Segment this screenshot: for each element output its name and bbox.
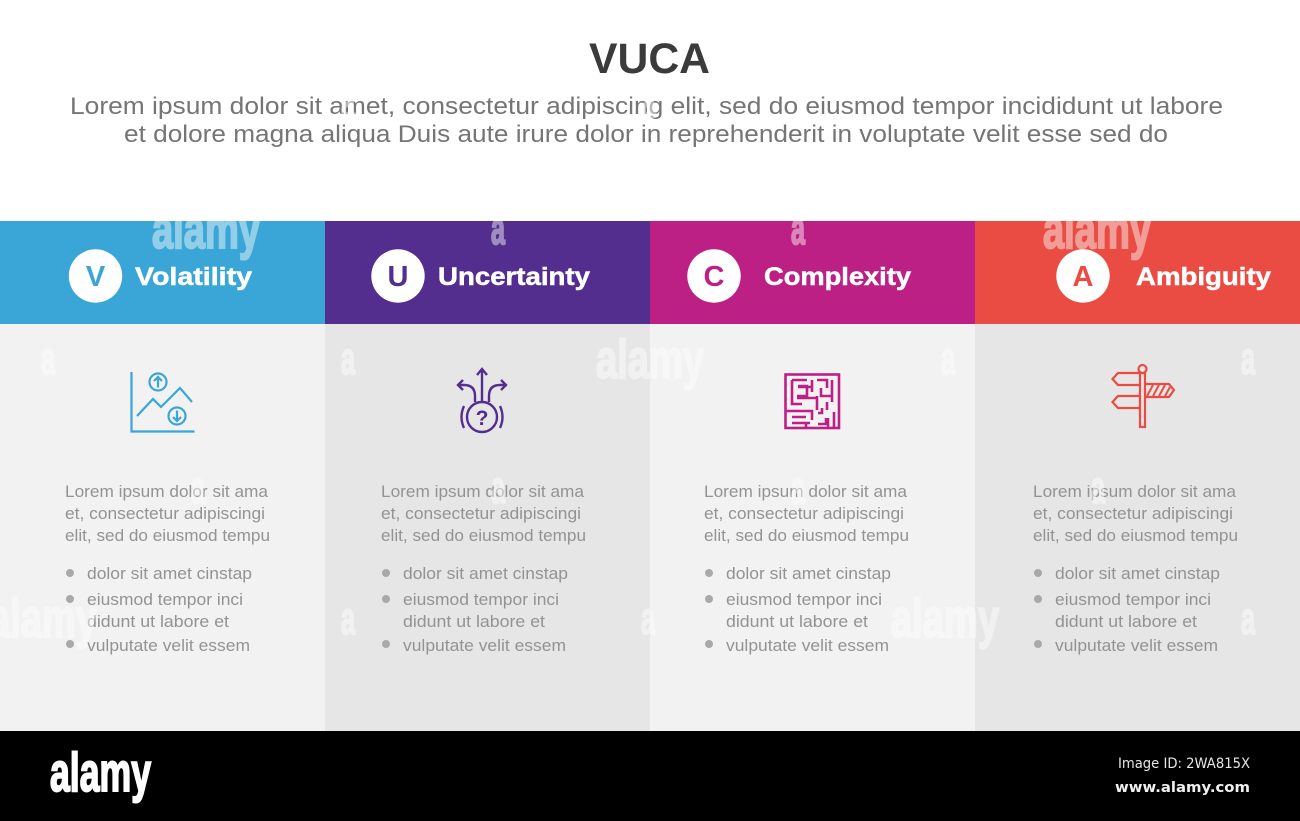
bullet list: uncertainty: vulputate velit essem [403, 636, 566, 655]
badge: U: U [388, 261, 408, 293]
watermark overlay: a [41, 333, 56, 384]
icon: maze [786, 374, 839, 428]
watermark overlay: a [1241, 333, 1256, 384]
description: ambiguity: Lorem ipsum dolor sit ama [1033, 482, 1237, 501]
header band: volatility [0, 221, 325, 324]
watermark overlay: a [641, 593, 656, 644]
bullet list: volatility [66, 564, 252, 655]
bullet list: ambiguity [1034, 564, 1220, 655]
description: ambiguity [1033, 482, 1238, 545]
description: volatility [65, 482, 270, 545]
icon: branching arrows with question mark [458, 369, 506, 432]
watermark overlay: a [341, 333, 356, 384]
bullet list: complexity: eiusmod tempor inci [726, 590, 882, 609]
watermark overlay: a [1241, 593, 1256, 644]
bullet list: volatility: vulputate velit essem [87, 636, 250, 655]
subtitle text block: et dolore magna aliqua Duis aute irure dolor in reprehenderit in voluptate velit esse sed do [124, 121, 1168, 148]
bullet list: volatility: dolor sit amet cinstap [87, 564, 252, 583]
bullet list: ambiguity: vulputate velit essem [1055, 636, 1218, 655]
description: complexity [704, 482, 909, 545]
watermark overlay: a [341, 76, 356, 127]
watermark overlay: a [641, 76, 656, 127]
bullet list: ambiguity: didunt ut labore et [1055, 612, 1197, 631]
watermark overlay: a [191, 462, 206, 513]
footer logo: alamy [50, 741, 151, 803]
bullet list: volatility: didunt ut labore et [87, 612, 229, 631]
bullet list: uncertainty [382, 564, 568, 655]
subtitle text block [70, 93, 1223, 148]
image id: Image ID: 2WA815X [1118, 756, 1250, 772]
body card: volatility [0, 324, 325, 731]
description: uncertainty: elit, sed do eiusmod tempu [381, 526, 586, 545]
badge: V [69, 249, 122, 303]
icon: branching arrows with question mark: ? [476, 407, 488, 430]
badge: V: V [86, 261, 106, 293]
panel: ambiguity [975, 221, 1300, 731]
bullet list: complexity: dolor sit amet cinstap [726, 564, 891, 583]
description: volatility: et, consectetur adipiscingi [65, 504, 265, 523]
bullet list: ambiguity: dolor sit amet cinstap [1055, 564, 1220, 583]
watermark overlay: a [791, 203, 806, 254]
watermark overlay: a [341, 593, 356, 644]
watermark overlay: a [791, 462, 806, 513]
watermark overlay: alamy [891, 587, 999, 649]
title: VUCA [589, 35, 710, 83]
footer bar [0, 731, 1300, 821]
description: complexity: Lorem ipsum dolor sit ama [704, 482, 908, 501]
description: uncertainty: et, consectetur adipiscingi [381, 504, 581, 523]
bullet list: uncertainty: didunt ut labore et [403, 612, 545, 631]
badge: C: C [704, 261, 725, 293]
icon: signpost [1112, 365, 1174, 427]
watermark overlay [0, 76, 1256, 649]
watermark overlay: alamy [152, 198, 260, 260]
bullet list: ambiguity: eiusmod tempor inci [1055, 590, 1211, 609]
bullet list: complexity: vulputate velit essem [726, 636, 889, 655]
bullet list: uncertainty: eiusmod tempor inci [403, 590, 559, 609]
badge: C [687, 249, 741, 303]
header band: uncertainty [325, 221, 650, 324]
body card: uncertainty [325, 324, 650, 731]
watermark overlay: a [491, 203, 506, 254]
description: volatility: elit, sed do eiusmod tempu [65, 526, 270, 545]
description: volatility: Lorem ipsum dolor sit ama [65, 482, 269, 501]
watermark overlay: alamy [596, 328, 704, 390]
heading: Uncertainty: Uncertainty [438, 263, 590, 291]
panel: volatility [0, 221, 325, 731]
description: complexity: et, consectetur adipiscingi [704, 504, 904, 523]
panel: uncertainty [325, 221, 650, 731]
description: ambiguity: et, consectetur adipiscingi [1033, 504, 1233, 523]
body card: ambiguity [975, 324, 1300, 731]
bullet list: volatility: eiusmod tempor inci [87, 590, 243, 609]
header band: complexity [650, 221, 975, 324]
website: www.alamy.com [1115, 780, 1250, 796]
bullet list: complexity: didunt ut labore et [726, 612, 868, 631]
badge: A [1056, 249, 1110, 303]
subtitle text block: Lorem ipsum dolor sit amet, consectetur adipiscing elit, sed do eiusmod tempor incididunt ut labore [70, 93, 1223, 120]
heading: Ambiguity: Ambiguity [1136, 263, 1271, 291]
icon: volatile chart [132, 372, 194, 432]
body card: complexity [650, 324, 975, 731]
watermark overlay: a [1091, 462, 1106, 513]
badge: U [371, 249, 425, 303]
description: complexity: elit, sed do eiusmod tempu [704, 526, 909, 545]
heading: Volatility: Volatility [135, 263, 252, 291]
watermark overlay: alamy [1043, 198, 1151, 260]
heading: Complexity: Complexity [764, 263, 911, 291]
bullet list: complexity [705, 564, 891, 655]
watermark overlay: a [941, 333, 956, 384]
header band: ambiguity [975, 221, 1300, 324]
description: uncertainty: Lorem ipsum dolor sit ama [381, 482, 585, 501]
bullet list: uncertainty: dolor sit amet cinstap [403, 564, 568, 583]
badge: A: A [1073, 261, 1094, 293]
description: ambiguity: elit, sed do eiusmod tempu [1033, 526, 1238, 545]
watermark overlay: a [491, 462, 506, 513]
panel: complexity [650, 221, 975, 731]
description: uncertainty [381, 482, 586, 545]
